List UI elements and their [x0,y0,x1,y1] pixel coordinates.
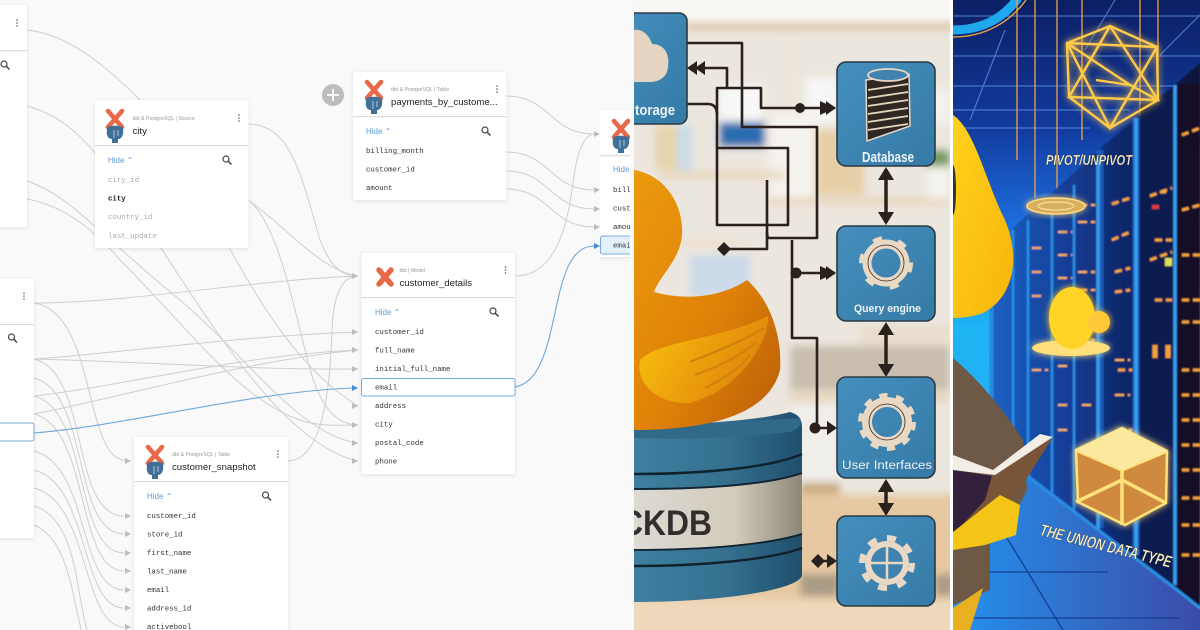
node: customer_snapshot: customer_snapshot [172,462,256,473]
connector pipes [687,43,837,568]
panel: data center illustration [950,0,1200,630]
server racks [990,63,1200,610]
node: city: country_id [108,214,152,222]
duck hand [953,495,1020,550]
node: customer_details: dbt | Model [400,268,425,274]
drum label: CKDB [620,504,712,543]
node: city: Hide ⌃ [108,156,133,165]
node: partial left card [0,279,34,538]
box: query engine [837,226,935,321]
node: payments_by_customer: customer_id [366,166,415,174]
node: partial right card: customer_id [613,206,662,214]
node: city [95,100,248,248]
node: payments_by_customer: dbt & PostgreSQL | Table [391,87,449,93]
box: user interfaces [837,377,935,478]
node: customer_snapshot: Hide ⌃ [147,492,172,501]
node: partial top-left card [0,5,27,227]
hanging wires [1017,0,1158,198]
glowing disk [1027,198,1085,214]
box: database [837,62,935,166]
lineage edges [27,30,594,630]
duck: yellow duck body [950,115,1013,318]
node: customer_details: city [375,422,393,430]
node: customer_details: customer_id [375,329,424,337]
node: payments_by_customer: payments_by_custome... [391,97,498,108]
ceiling ring [953,0,1026,37]
duck jacket [953,358,1027,605]
node: payments_by_customer: billing_month [366,148,424,156]
node: customer_snapshot: email [147,587,170,595]
node: customer_details: phone [375,458,397,466]
box: user interfaces: User Interfaces [842,460,932,472]
node: customer_snapshot: last_name [147,568,187,576]
floor [953,470,1200,630]
button: add node [322,84,344,106]
label: pivot unpivot: PIVOT/UNPIVOT [1046,153,1133,169]
node: customer_snapshot: customer_id [147,513,196,521]
node: payments_by_customer: amount [366,185,393,193]
node: customer_details: full_name [375,348,415,356]
duck: orange rubber duck [634,170,780,430]
open book [953,434,1053,540]
panel: data lineage graph [0,0,671,630]
node: customer_details: initial_full_name [375,366,450,374]
node: city: city [132,126,147,137]
node: city: city [108,196,126,204]
ceiling grid [953,0,1200,128]
rack status lights [1032,128,1200,555]
node: city: last_update [108,233,157,241]
node: partial right card: amount [613,224,640,232]
edge arrowheads [125,131,600,630]
node: partial right card: email [613,242,636,250]
node: customer_snapshot: address_id [147,606,191,614]
node: customer_snapshot: dbt & PostgreSQL | Table [172,452,230,458]
node: customer_details [362,253,515,474]
glowing icosahedron [1067,26,1158,128]
glowing cube [1076,428,1167,525]
box: bottom component [837,516,935,606]
double arrows between boxes [878,167,894,516]
box: database: Database [862,149,914,166]
shelf background [624,0,960,630]
drum: DuckDB database cylinder [620,412,802,602]
node: customer_details: customer_details [400,278,472,289]
node: partial right card: Hide [613,165,630,174]
node: partial right card: billing_month [613,187,671,195]
node: city: city_id [108,177,139,185]
node: customer_details: Hide ⌃ [375,308,400,317]
node: customer_snapshot: first_name [147,550,191,558]
node: payments_by_customer: Hide ⌃ [366,127,391,136]
node: customer_snapshot [134,437,288,630]
duck leg [953,588,983,630]
box: query engine: Query engine [854,303,921,315]
box: storage: torage [635,102,675,119]
node: customer_snapshot: store_id [147,532,182,540]
node: customer_details: email [375,384,398,392]
node: partial right card [600,118,630,259]
duck wing [639,316,768,403]
node: customer_details: address [375,403,406,411]
node: customer_details: postal_code [375,440,424,448]
box: storage [634,12,688,125]
panel: DuckDB architecture illustration [610,0,960,630]
node: payments_by_customer [353,72,506,200]
glowing duck orb [1032,287,1110,356]
node: city: dbt & PostgreSQL | Source [132,116,195,122]
